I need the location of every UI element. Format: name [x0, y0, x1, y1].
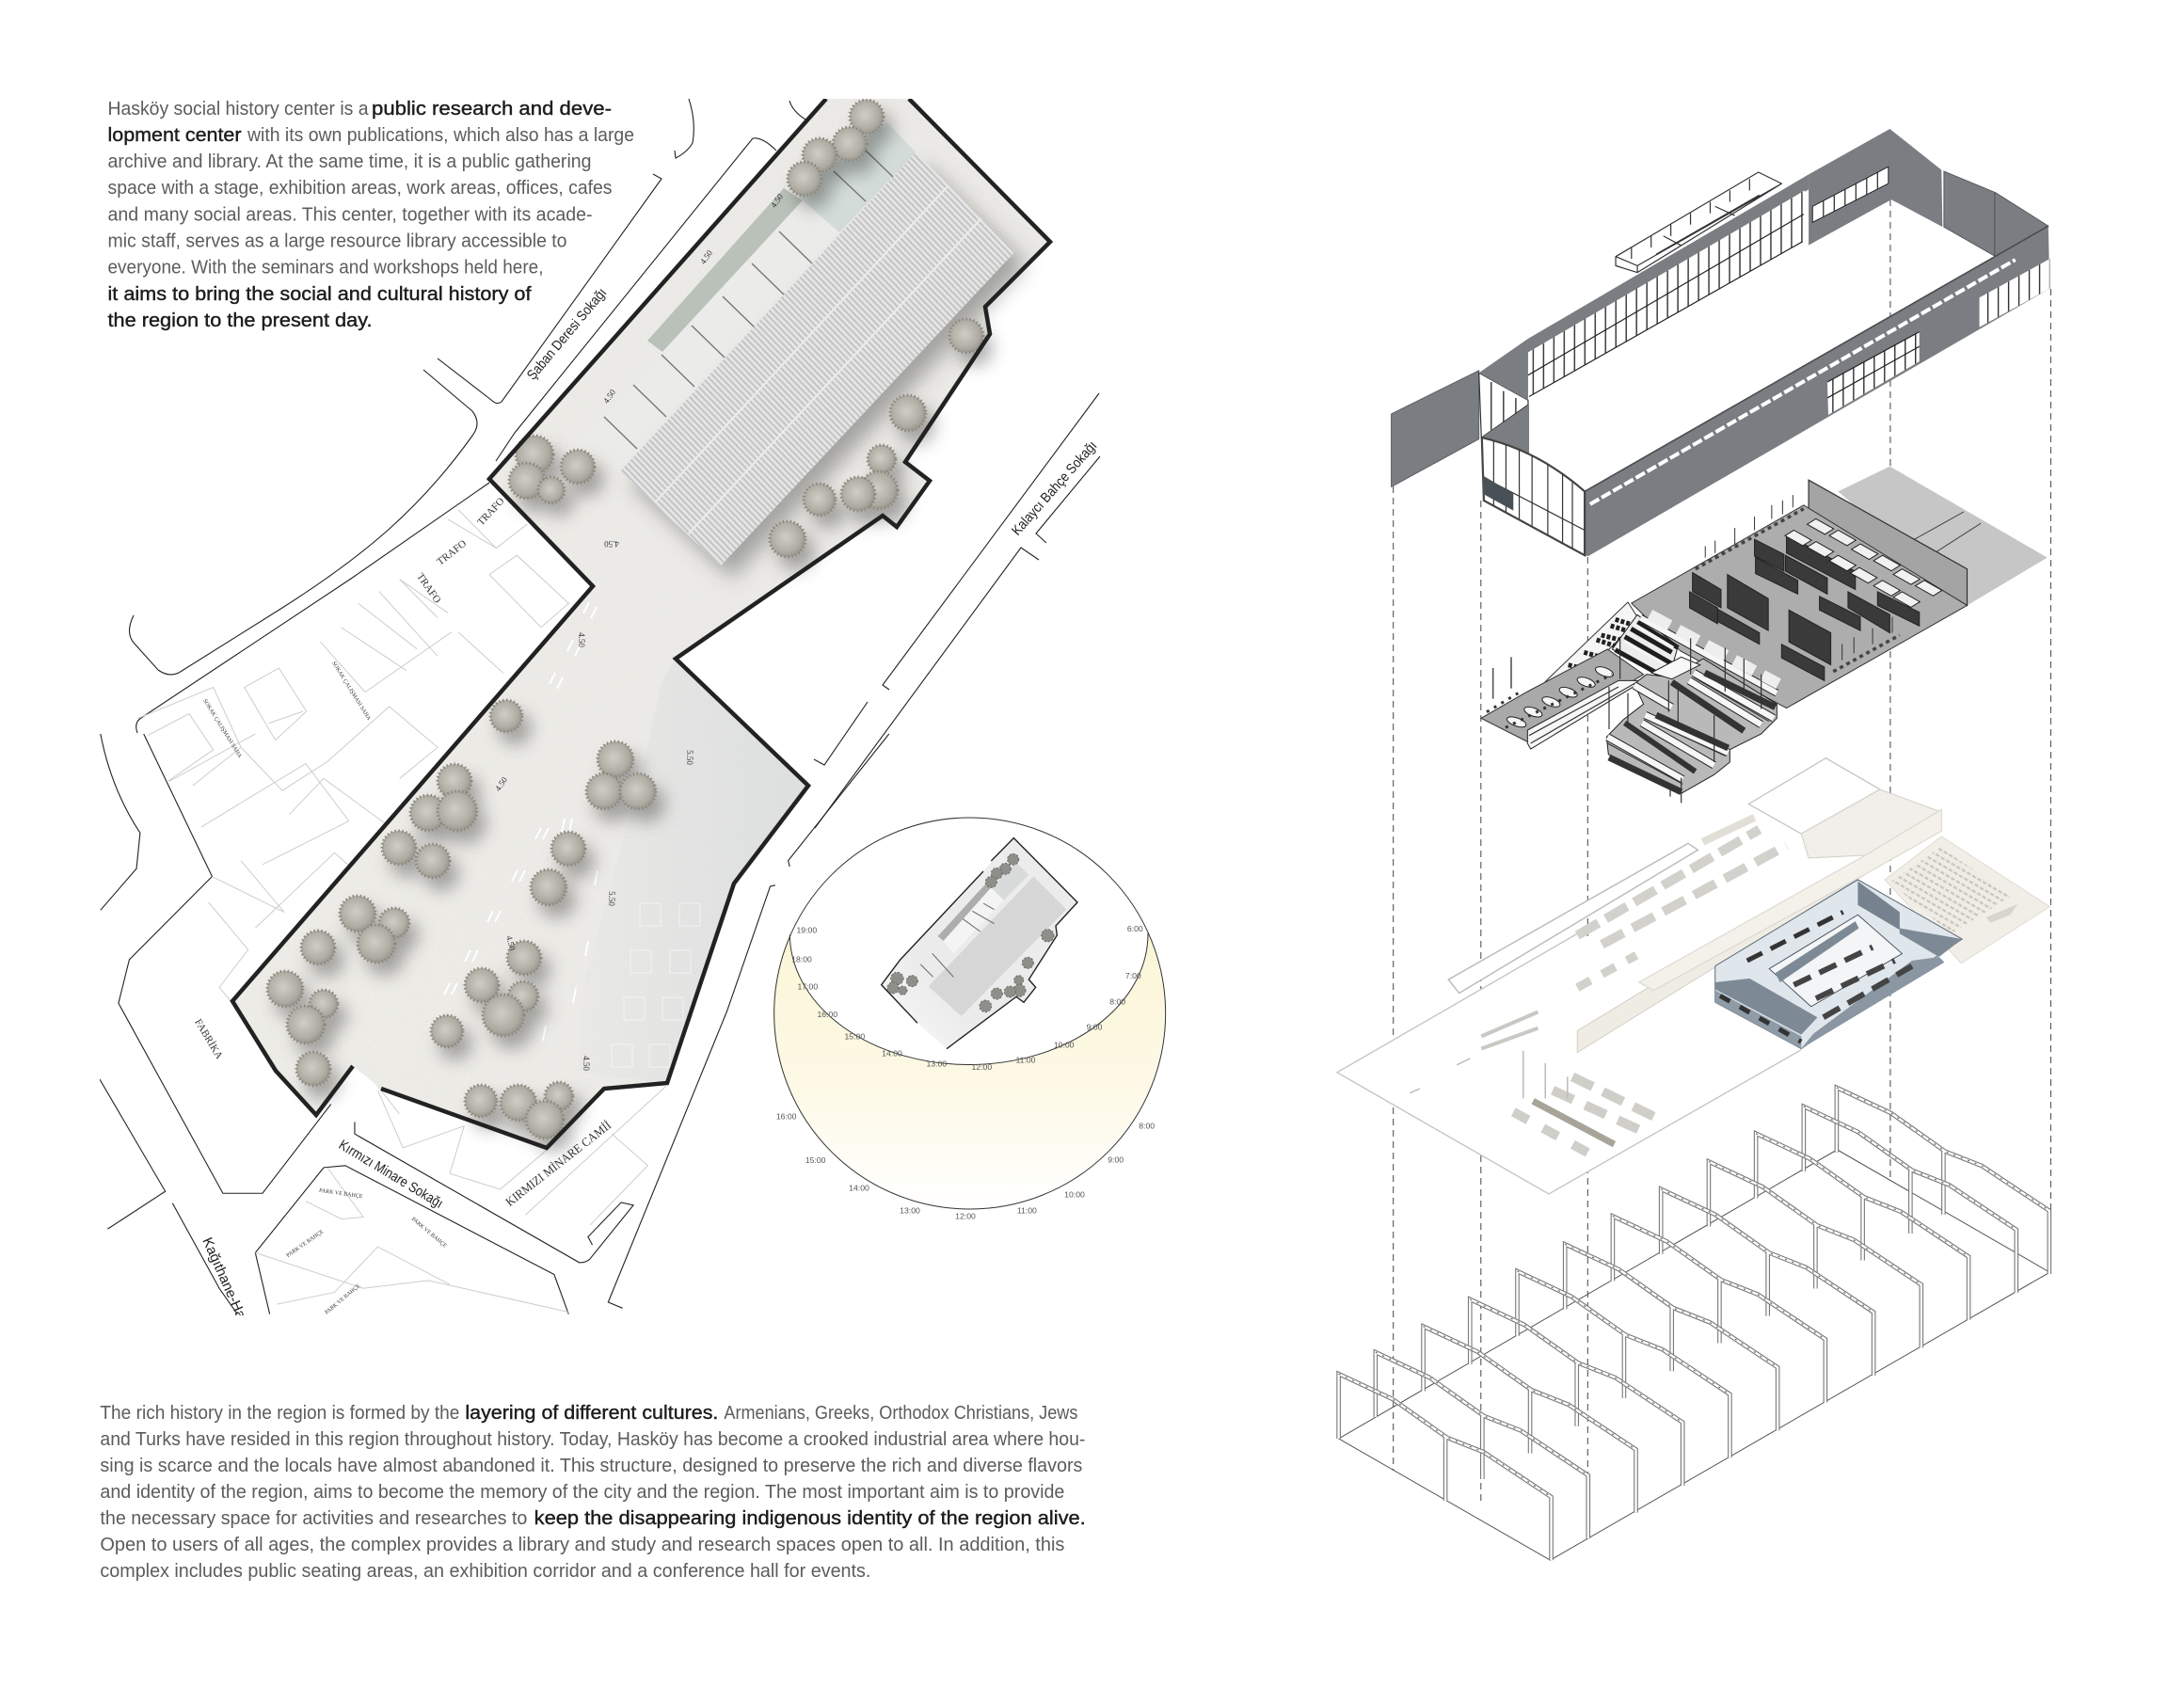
history text block: layering of different cultures. [465, 1403, 718, 1424]
intro text block: mic staff, serves as a large resource library accessible to [107, 231, 566, 252]
map labels: KIRMIZI MİNARE CAMİİ [502, 1118, 614, 1209]
auditorium [1885, 836, 2049, 963]
map labels: PARK VE BAHÇE [286, 1229, 326, 1259]
roof with strips [582, 122, 1015, 565]
stepped reading and lounge area [1481, 602, 1778, 803]
history text block: sing is scarce and the locals have almost abandoned it. This structure, designed to preserve the rich and diverse flavors [100, 1456, 1082, 1476]
lounge balustrade [1527, 680, 1644, 749]
hour labels inner: 18:00 [791, 955, 812, 964]
projection dashed lines [1394, 199, 2050, 1524]
parking marks [444, 602, 598, 1041]
map labels: SOKAK ÇALIŞMASI SAHA [201, 698, 243, 759]
map labels [192, 496, 614, 1316]
dark display panels [1690, 534, 1920, 680]
intro text block [107, 99, 634, 331]
dimension labels [493, 192, 785, 1071]
entry signage [1483, 475, 1513, 511]
hour labels inner: 14:00 [882, 1048, 902, 1058]
hour labels inner: 16:00 [817, 1010, 837, 1019]
hour labels inner: 9:00 [1087, 1022, 1103, 1031]
hour labels inner: 12:00 [971, 1062, 992, 1072]
lamps [1493, 657, 1511, 699]
tribune base [1606, 659, 1777, 793]
lower tables [1513, 1076, 1661, 1160]
dimension labels: 4.50 [601, 388, 617, 406]
rear slab [1838, 467, 2048, 605]
central landing [1651, 657, 1700, 679]
pale square panels [662, 200, 803, 352]
history text block: keep the disappearing indigenous identity of the region alive. [534, 1508, 1086, 1529]
upper tables [1577, 818, 1787, 988]
history text block: The rich history in the region is formed by the [100, 1403, 459, 1424]
white bands [1607, 673, 1774, 779]
stage counter [1985, 904, 2017, 923]
hour labels outer: 10:00 [1064, 1189, 1085, 1199]
street lines lower [97, 734, 889, 1314]
grey counter [1533, 1101, 1614, 1144]
hour labels inner: 13:00 [926, 1059, 947, 1069]
map labels: PARK VE BAHÇE [319, 1188, 363, 1200]
sun path outer circle [774, 818, 1166, 1209]
map labels: SOKAK ÇALIŞMASI SAHA [330, 661, 372, 722]
pendant lamps [1705, 495, 1892, 661]
lounge chairs [1487, 675, 1612, 727]
paving joints [612, 903, 700, 1067]
dimension labels: 4.50 [504, 934, 518, 952]
hour labels inner: 17:00 [797, 982, 818, 992]
hour labels inner: 10:00 [1054, 1041, 1075, 1050]
axonometric layer: ground floor [1337, 758, 2049, 1194]
front glazing bay A [1827, 332, 1920, 415]
axonometric layer: facade shell [1392, 129, 2049, 556]
hour labels inner: 7:00 [1125, 971, 1141, 980]
hour labels outer: 9:00 [1108, 1155, 1124, 1165]
intro text block: the region to the present day. [107, 311, 373, 331]
dimension labels: 4.50 [577, 632, 586, 647]
history text block: and identity of the region, aims to become the memory of the city and the region. The most important aim is to provide [100, 1482, 1064, 1503]
floor outline [1337, 933, 1801, 1194]
intro text block: lopment center [107, 125, 242, 146]
far left wall [1392, 371, 1479, 486]
hour labels outer [776, 1111, 1155, 1221]
dimension labels: 4.50 [769, 192, 785, 210]
poles [1609, 637, 1762, 803]
edge chairs [1696, 509, 1900, 672]
axonometric layer: upper floor [1481, 467, 2048, 803]
portal frames [1339, 1088, 2049, 1560]
dimension labels: 5.50 [685, 750, 694, 765]
lounge slab [1481, 649, 1644, 743]
rooftop frame [1616, 172, 1781, 273]
street names: Kalaycı Bahçe Sokağı [1009, 438, 1100, 539]
dimension labels: 4.50 [493, 775, 509, 793]
base rectangle [1339, 1150, 2049, 1560]
hour labels inner: 8:00 [1109, 996, 1125, 1006]
hour labels outer: 8:00 [1139, 1122, 1155, 1131]
intro text block: archive and library. At the same time, it is a public gathering [107, 151, 591, 172]
upper reading rows [1612, 614, 1678, 671]
axonometric layer: structural portal frames [1339, 1088, 2049, 1560]
front glazing bay B [1980, 259, 2049, 327]
grey-green strip [647, 188, 803, 352]
map labels: TRAFO [435, 538, 469, 567]
stair flight [1537, 602, 1639, 692]
map labels: PARK VE BAHÇE [325, 1283, 361, 1316]
intro text block: it aims to bring the social and cultural history of [107, 284, 532, 305]
map labels: TRAFO [414, 571, 443, 606]
dark bench rows [1609, 673, 1776, 792]
street names: Kağıthane-Halıcıoğlu [199, 1235, 267, 1362]
hour labels outer: 14:00 [849, 1183, 869, 1192]
dimension labels: 4.50 [582, 1056, 591, 1071]
upper long slab outline [1448, 843, 1698, 993]
partition wall [1809, 480, 1967, 605]
hour labels outer: 16:00 [776, 1111, 797, 1121]
intro text block: public research and deve- [372, 99, 612, 119]
neighbouring building outlines [137, 510, 568, 829]
miniature site [882, 838, 1077, 1049]
entry wall dark [1479, 339, 1528, 400]
dimension labels: 4.50 [604, 539, 619, 549]
history text block: Open to users of all ages, the complex provides a library and study and research spaces open to all. In addition, this [100, 1535, 1064, 1555]
study tables [1785, 518, 1942, 607]
intro text block: space with a stage, exhibition areas, work areas, offices, cafes [107, 178, 612, 199]
floor plates [1632, 467, 2048, 709]
lounge ovals [1506, 665, 1615, 729]
history text block: complex includes public seating areas, an exhibition corridor and a conference hall for events. [100, 1561, 870, 1582]
intro text block: with its own publications, which also has a large [247, 125, 634, 146]
clerestory windows [1590, 260, 2016, 504]
rear box [1748, 758, 1880, 834]
history text block: Armenians, Greeks, Orthodox Christians, Jews [724, 1403, 1077, 1424]
panel dividers [604, 149, 895, 449]
hour labels inner: 11:00 [1015, 1055, 1036, 1064]
neighbouring building outlines lower [168, 734, 666, 1313]
inner sun path arc [789, 933, 1148, 1064]
hour labels inner [791, 924, 1143, 1072]
street names [199, 285, 1100, 1362]
front long wall [1585, 226, 2049, 556]
dimension labels: 4.50 [698, 248, 714, 266]
intro text block: everyone. With the seminars and workshops held here, [107, 258, 544, 279]
map labels: TRAFO [475, 496, 507, 528]
right end wall [1944, 171, 2048, 257]
map labels: PARK VE BAHÇE [410, 1217, 448, 1250]
site plan [97, 99, 1100, 1362]
long bench [1481, 1012, 1538, 1049]
sun crescent [773, 933, 1165, 1208]
pale green panels [788, 122, 916, 232]
history text block: the necessary space for activities and researches to [100, 1508, 527, 1529]
history text block [100, 1403, 1086, 1582]
roof ridges [655, 185, 981, 534]
back wall strip [1528, 174, 1809, 352]
hour labels outer: 11:00 [1017, 1205, 1037, 1215]
hour labels outer: 13:00 [900, 1205, 920, 1215]
site boundary [232, 99, 1050, 1148]
history text block: and Turks have resided in this region throughout history. Today, Hasköy has become a crooked industrial area where hou- [100, 1429, 1085, 1450]
street lines upper [130, 99, 1100, 828]
hour labels outer: 15:00 [805, 1155, 826, 1165]
lamps and small items [1410, 1051, 1568, 1098]
map labels: FABRİKA [192, 1017, 225, 1061]
recessed entry glazing [1479, 373, 1528, 438]
table row along tribune [1640, 618, 1777, 693]
site ground [232, 99, 1050, 1148]
dimension labels: 5.50 [607, 891, 616, 906]
intro text block: Hasköy social history center is a [107, 99, 369, 119]
back wall glazing [1528, 190, 1805, 396]
hour labels outer: 12:00 [955, 1212, 976, 1221]
main floor slab [1632, 505, 1967, 709]
paved zone [677, 664, 805, 1036]
sun path diagram [773, 818, 1166, 1221]
corrugated roof [620, 152, 1015, 565]
beige ramp wall [1577, 858, 1865, 1053]
street names: Şaban Deresi Sokağı [524, 285, 610, 383]
intro text block: and many social areas. This center, together with its acade- [107, 205, 593, 226]
hour labels inner: 15:00 [844, 1032, 865, 1042]
back end windows [1812, 167, 1889, 222]
trees [267, 100, 983, 1139]
front end glazing [1482, 438, 1585, 555]
back end wall [1809, 129, 1942, 246]
blue glazed room [1715, 880, 1962, 1049]
street names: Kırmızı Minare Sokağı [336, 1137, 446, 1212]
hour labels inner: 6:00 [1127, 924, 1143, 933]
hour labels inner: 19:00 [796, 926, 817, 935]
